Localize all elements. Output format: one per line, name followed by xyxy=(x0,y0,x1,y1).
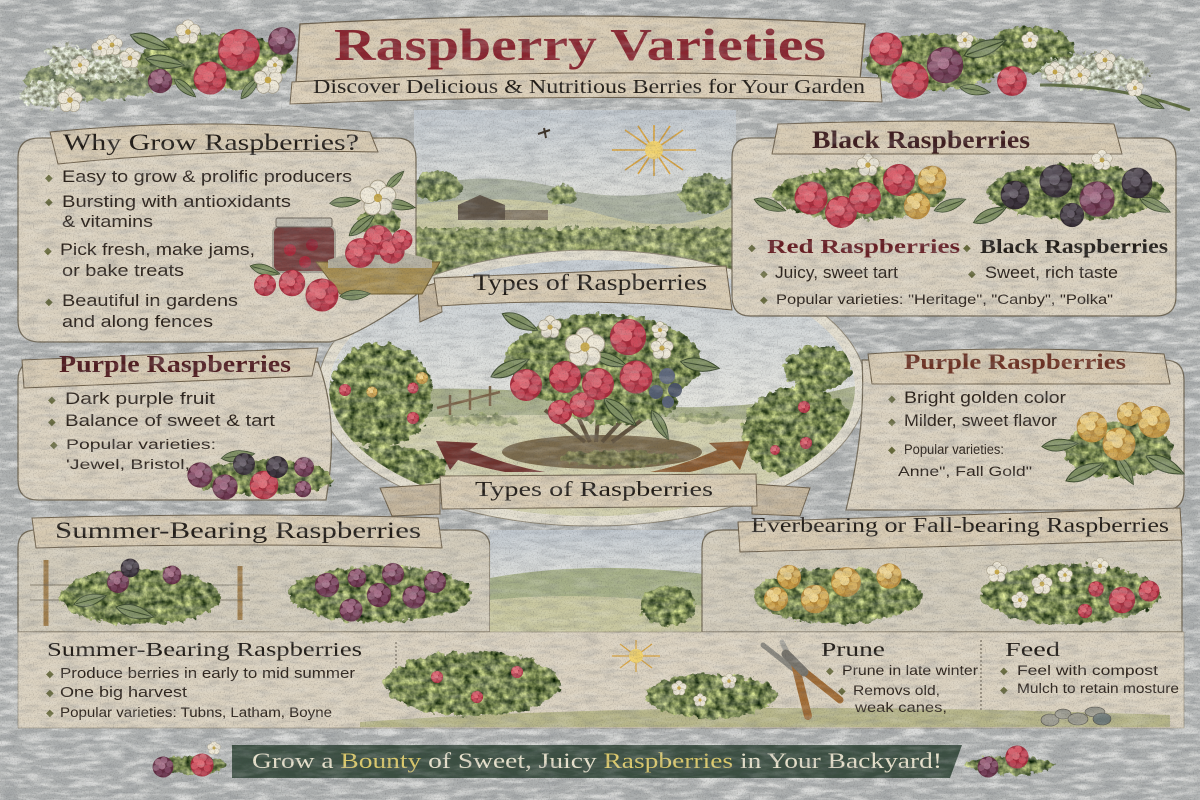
text: varieties: Popular varieties: xyxy=(904,442,1004,457)
heading ribbon: summer-bearing xyxy=(32,515,442,548)
panel: black raspberries xyxy=(732,121,1176,316)
icon: pruning shears xyxy=(763,642,840,716)
panel: golden raspberries right xyxy=(846,349,1187,510)
icon: sun xyxy=(612,125,696,176)
text block: feed: ◆ xyxy=(1000,685,1008,696)
heading ribbon: why grow: Why Grow Raspberries? xyxy=(63,130,359,155)
text block: prune: weak canes, xyxy=(854,700,947,715)
text: milder: Milder, sweet flavor xyxy=(904,411,1057,430)
bullet list: why grow: ◆ xyxy=(45,197,53,208)
illustration: jar and berry basket xyxy=(249,168,440,312)
bullet list: why grow: & vitamins xyxy=(62,212,153,231)
footer banner xyxy=(153,741,1054,778)
bullet list: why grow: and along fences xyxy=(62,312,213,331)
text block: summer-bearing: One big harvest xyxy=(60,684,188,701)
text: varieties: ◆ xyxy=(888,445,896,456)
heading ribbon: black raspberries: Black Raspberries xyxy=(812,127,1030,154)
dotted dividers xyxy=(396,640,981,712)
text: varieties: ◆ xyxy=(50,440,58,451)
text block: feed xyxy=(1000,639,1179,696)
title banner xyxy=(296,16,865,82)
text: juicy: Juicy, sweet tart xyxy=(775,263,898,282)
footer text: Grow a Bounty of Sweet, Juicy Raspberries in Your Backyard! xyxy=(252,748,942,773)
text: jewel: 'Jewel, Bristol, xyxy=(66,457,190,472)
text: varieties: Popular varieties: xyxy=(66,437,216,452)
bullet list: why grow: Beautiful in gardens xyxy=(62,291,238,310)
bullet list: why grow: Easy to grow & prolific producers xyxy=(62,167,352,186)
text: anne: Anne", Fall Gold" xyxy=(898,464,1032,479)
text: popular varieties: Popular varieties: "Heritage", "Canby", "Polka" xyxy=(776,292,1113,307)
illustration: purple berries xyxy=(187,448,334,500)
text block: summer-bearing xyxy=(46,640,362,720)
heading ribbon: everbearing: Everbearing or Fall-bearing Raspberries xyxy=(751,513,1169,537)
central bush xyxy=(488,308,720,442)
text block: summer-bearing: Popular varieties: Tubns, Latham, Boyne xyxy=(60,705,332,720)
text block: feed: Feed xyxy=(1005,639,1060,661)
bullet: red: ◆ xyxy=(748,243,756,254)
text: golden colour: Bright golden color xyxy=(904,388,1066,407)
icon: bee xyxy=(538,128,550,138)
text: golden colour: ◆ xyxy=(888,394,896,405)
grass ground xyxy=(360,708,1170,727)
text block: summer-bearing: Produce berries in early to mid summer xyxy=(60,665,355,682)
ribbon: types bottom: Types of Raspberries xyxy=(475,477,713,501)
bullet list: why grow: Bursting with antioxidants xyxy=(62,192,291,211)
bullet list: why grow: ◆ xyxy=(45,173,53,184)
text block: summer-bearing: ◆ xyxy=(46,688,54,699)
floral garland right xyxy=(865,26,1190,113)
title: Raspberry Varieties xyxy=(334,19,826,70)
arrow: left xyxy=(436,441,545,472)
illustration: trellis and bushes xyxy=(30,559,472,626)
illustration: bushes and sun xyxy=(384,640,778,718)
subtitle ribbon: Discover Delicious & Nutritious Berries for Your Garden xyxy=(313,76,865,98)
text: varieties xyxy=(50,437,216,452)
heading ribbon: purple left xyxy=(22,348,318,388)
panel: summer-bearing illustration xyxy=(18,515,490,632)
text block: prune: Prune in late winter xyxy=(842,663,979,678)
illustration: red and golden berries xyxy=(752,154,968,228)
text: dark purple: Dark purple fruit xyxy=(65,389,215,408)
text: balance: ◆ xyxy=(48,417,56,428)
text: popular varieties: ◆ xyxy=(760,295,768,306)
ribbon: types top xyxy=(418,266,732,322)
text block: summer-bearing: ◆ xyxy=(46,669,54,680)
subtitle ribbon xyxy=(290,73,882,104)
text block: feed: Feel with compost xyxy=(1017,663,1158,678)
bullet list: why grow: Pick fresh, make jams, xyxy=(60,240,255,259)
bullet list: why grow: ◆ xyxy=(45,297,53,308)
text block: prune: ◆ xyxy=(838,686,846,697)
panel: everbearing illustration xyxy=(702,508,1182,632)
text block: summer-bearing: Summer-Bearing Raspberries xyxy=(47,640,362,661)
heading ribbon: why grow xyxy=(50,124,378,164)
heading ribbon: everbearing xyxy=(738,508,1182,552)
arrow: right xyxy=(650,441,750,472)
ribbon: types top: Types of Raspberries xyxy=(473,270,707,295)
text block: prune: Removs old, xyxy=(853,683,940,698)
text: balance: Balance of sweet & tart xyxy=(65,411,275,430)
panel: lower information strip xyxy=(18,632,1184,728)
text: dark purple: ◆ xyxy=(48,395,56,406)
panel: why grow raspberries xyxy=(18,124,440,342)
text: sweet: Sweet, rich taste xyxy=(985,263,1118,282)
text: sweet: ◆ xyxy=(968,269,976,280)
panel: purple raspberries left xyxy=(18,348,334,500)
text: juicy: ◆ xyxy=(760,269,768,280)
bullet list: why grow: or bake treats xyxy=(62,261,184,280)
background landscape centre top xyxy=(414,110,736,275)
ribbon: types bottom xyxy=(380,474,810,516)
bullet list: why grow: ◆ xyxy=(44,246,52,257)
heading ribbon: purple right xyxy=(868,349,1170,384)
subheading: black raspberries: Black Raspberries xyxy=(980,236,1168,258)
text block: prune xyxy=(821,639,979,715)
illustration: golden and mixed bushes xyxy=(754,558,1160,624)
illustration: black berries xyxy=(971,150,1173,228)
text block: prune: Prune xyxy=(821,639,885,661)
divider bullet: ◆ xyxy=(963,243,971,254)
landscape between summer and fall panels xyxy=(490,530,704,632)
heading ribbon: black raspberries xyxy=(772,121,1122,154)
heading ribbon: purple right: Purple Raspberries xyxy=(904,349,1127,374)
heading ribbon: summer-bearing: Summer-Bearing Raspberries xyxy=(55,518,421,543)
text block: summer-bearing: ◆ xyxy=(46,708,54,719)
landscape xyxy=(329,260,855,516)
subheading: red raspberries: Red Raspberries xyxy=(767,236,960,258)
illustration: rocks xyxy=(1041,707,1111,726)
text: milder: ◆ xyxy=(888,417,896,428)
illustration: golden berries xyxy=(1041,402,1187,487)
bullet list: why grow xyxy=(44,167,352,331)
text block: feed: Mulch to retain mosture xyxy=(1017,681,1179,696)
heading ribbon: purple left: Purple Raspberries xyxy=(59,352,291,378)
floral garland left xyxy=(20,20,296,112)
text block: prune: ◆ xyxy=(826,666,834,677)
text block: feed: ◆ xyxy=(1000,666,1008,677)
central oval scene xyxy=(318,250,866,530)
